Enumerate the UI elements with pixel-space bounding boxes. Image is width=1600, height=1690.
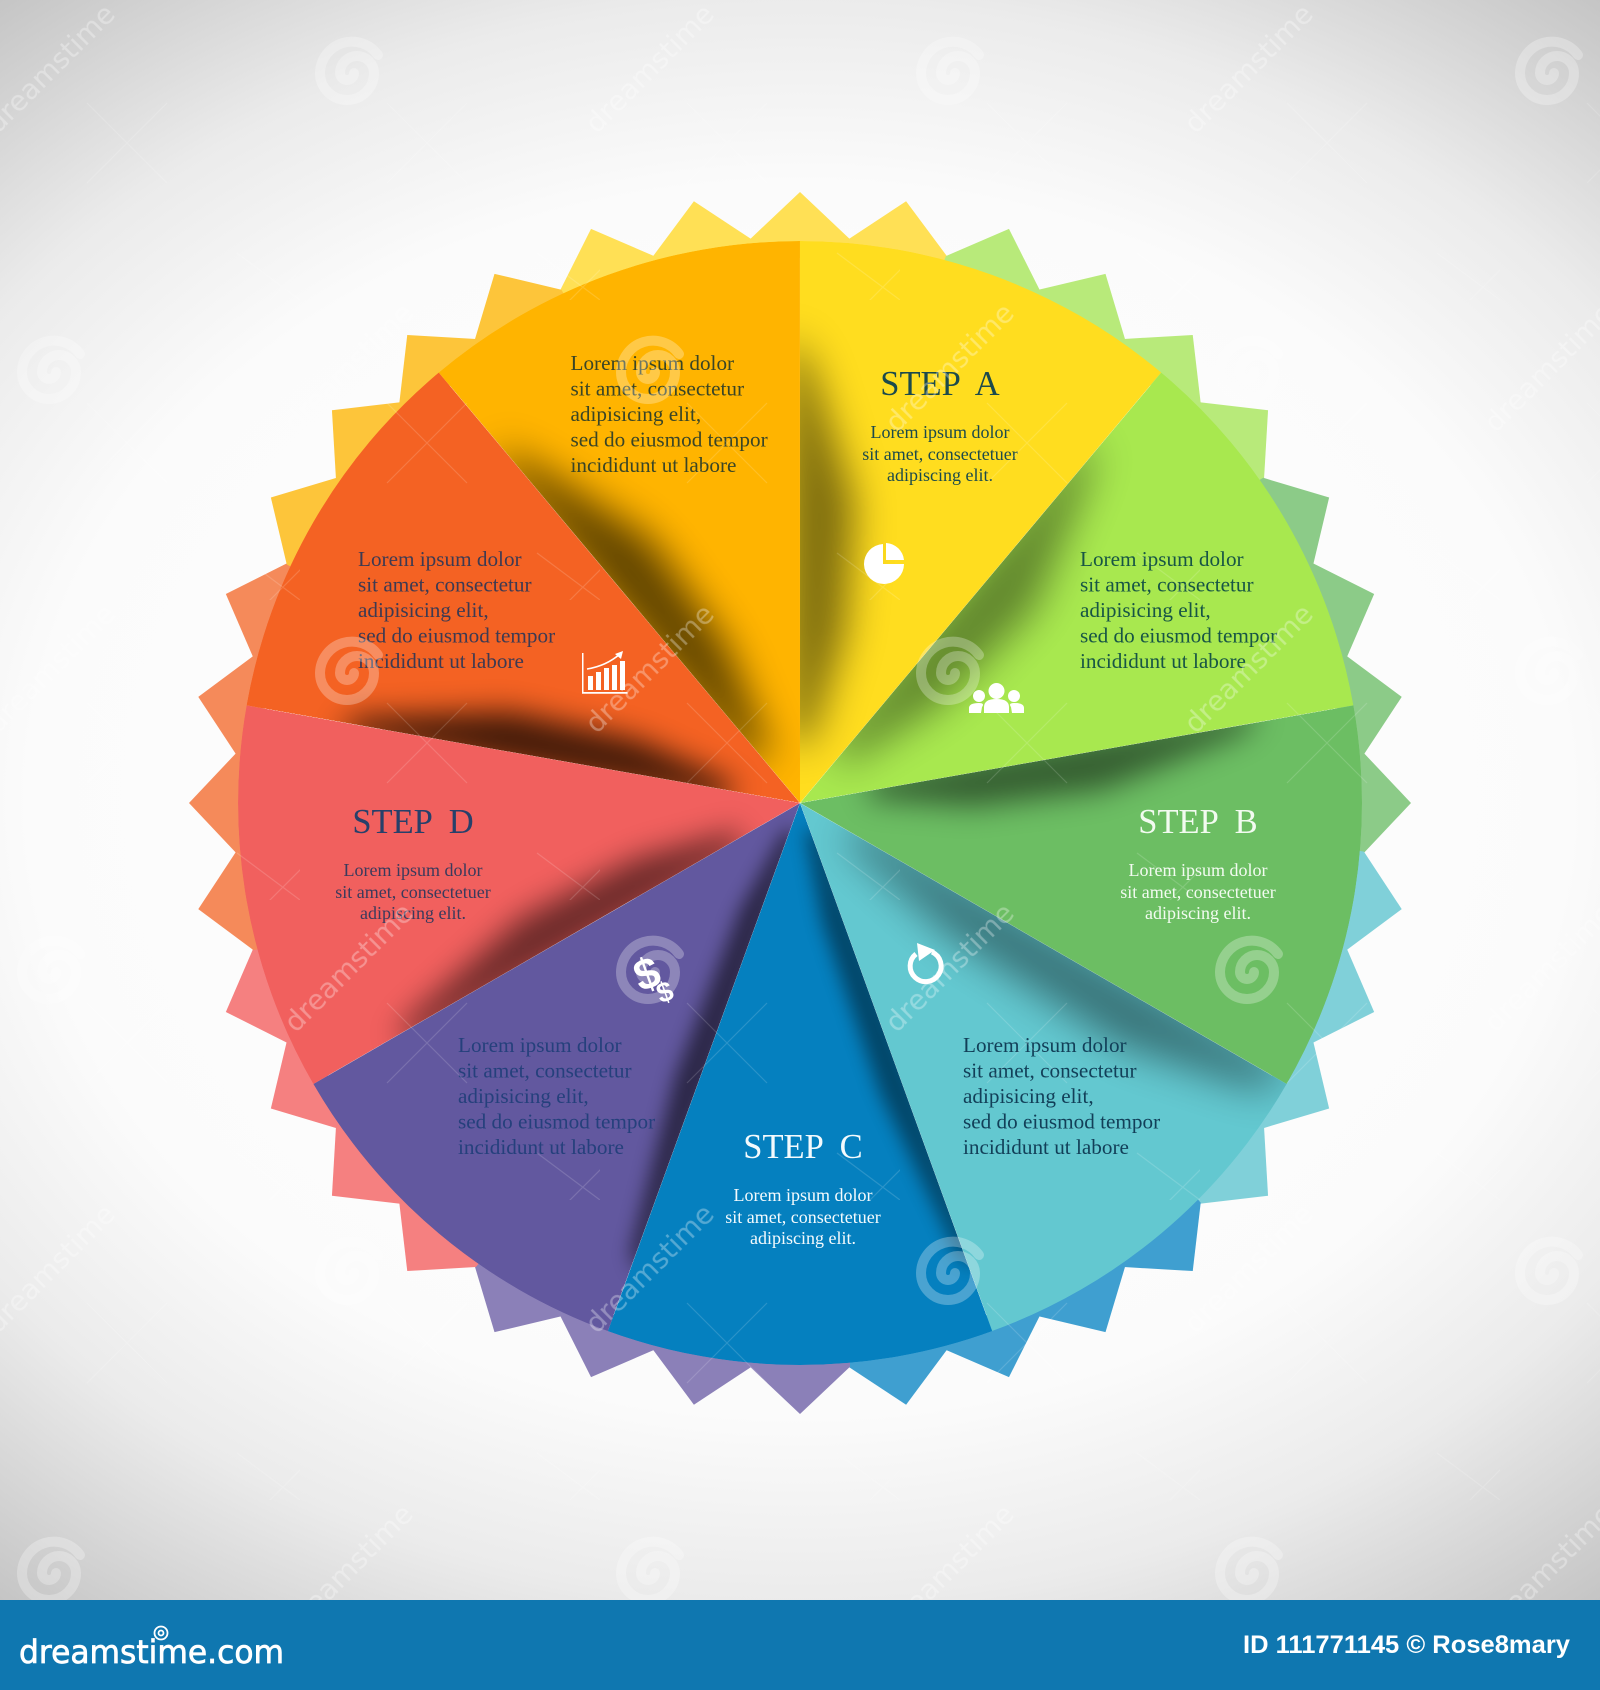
text: teal sector: sed do eiusmod tempor [963, 1110, 1160, 1134]
spikes: light green [939, 212, 1300, 491]
body: step C: adipiscing elit. [750, 1228, 856, 1248]
text: teal sector: incididunt ut labore [963, 1135, 1129, 1159]
text: orange sector: incididunt ut labore [358, 649, 524, 673]
icon: people [969, 683, 1024, 713]
spikes: salmon [209, 942, 488, 1303]
icon: dollar signs: $ [627, 947, 667, 1002]
body: step D [335, 860, 491, 923]
watermark wordmarks: dreamstime [1177, 0, 1319, 139]
body: step A: adipiscing elit. [887, 465, 993, 485]
text: orange sector: sed do eiusmod tempor [358, 624, 555, 648]
spikes: amber [246, 249, 571, 574]
sector: green step B [800, 706, 1362, 1084]
text: teal sector [963, 1033, 1160, 1159]
body: step D: adipiscing elit. [360, 903, 466, 923]
text: teal sector: sit amet, consectetur [963, 1058, 1137, 1082]
text: amber sector: incididunt ut labore [570, 453, 736, 477]
wheel diagram [189, 192, 1411, 1414]
watermark wordmarks: dreamstime [578, 597, 720, 739]
footer bar [0, 1600, 1600, 1690]
watermark wordmarks: dreamstime [878, 1497, 1020, 1639]
spikes: teal [1185, 848, 1410, 1234]
spikes: green [1247, 454, 1411, 853]
text: lime sector: Lorem ipsum dolor [1080, 547, 1244, 571]
body: step A: sit amet, consectetuer [862, 444, 1018, 464]
text: orange sector [358, 547, 555, 673]
text: amber sector: adipisicing elit, [570, 402, 701, 426]
heading: step A: STEP A [880, 365, 1000, 403]
body: step A [862, 422, 1018, 485]
heading: step C: STEP C [743, 1128, 863, 1166]
text: orange sector: Lorem ipsum dolor [358, 547, 522, 571]
body: step B: adipiscing elit. [1145, 903, 1251, 923]
icon: dollar signs: $ [652, 975, 678, 1009]
body: step B: sit amet, consectetuer [1120, 882, 1276, 902]
footer credit: ID 111771145 © Rose8mary [1243, 1631, 1570, 1659]
text: step A [862, 365, 1018, 485]
text: lime sector [1080, 547, 1277, 673]
text: lime sector: sit amet, consectetur [1080, 572, 1254, 596]
body: step D: sit amet, consectetuer [335, 882, 491, 902]
watermark wordmarks: dreamstime [878, 896, 1020, 1038]
text: teal sector: adipisicing elit, [963, 1084, 1094, 1108]
text: purple sector: Lorem ipsum dolor [458, 1033, 622, 1057]
text: teal sector: Lorem ipsum dolor [963, 1033, 1127, 1057]
body: step C: sit amet, consectetuer [725, 1207, 881, 1227]
text: purple sector: sed do eiusmod tempor [458, 1110, 655, 1134]
body: step A: Lorem ipsum dolor [871, 422, 1009, 442]
body: step C [725, 1185, 881, 1248]
body: step B [1120, 860, 1276, 923]
text: amber sector: sit amet, consectetur [570, 376, 744, 400]
sector: orange [246, 372, 800, 803]
icon: bar chart [582, 651, 628, 694]
text: amber sector: Lorem ipsum dolor [570, 351, 734, 375]
footer logo: spiral mark [154, 1626, 168, 1640]
text: orange sector: adipisicing elit, [358, 598, 489, 622]
heading: step B: STEP B [1138, 803, 1258, 841]
watermark wordmarks: dreamstime [878, 296, 1020, 438]
footer logo text: dreamstime.com [19, 1633, 284, 1671]
text: amber sector: sed do eiusmod tempor [570, 428, 768, 452]
text: purple sector: sit amet, consectetur [458, 1058, 632, 1082]
watermark wordmarks: dreamstime [1177, 1197, 1319, 1339]
text: step D [335, 803, 491, 923]
sector: blue step C [608, 804, 992, 1365]
spikes: orange [189, 547, 305, 958]
spikes: purple [451, 1250, 850, 1414]
heading: step D: STEP D [352, 803, 474, 841]
sector: red step D [238, 706, 800, 1084]
sector: purple [314, 803, 800, 1331]
icon: pie chart [864, 543, 904, 584]
body: step B: Lorem ipsum dolor [1129, 860, 1267, 880]
watermark wordmarks: dreamstime [1177, 597, 1319, 739]
watermark wordmarks: dreamstime [277, 1497, 419, 1639]
watermark wordmarks: dreamstime [578, 1197, 720, 1339]
watermark wordmarks: dreamstime [277, 296, 419, 438]
text: lime sector: sed do eiusmod tempor [1080, 624, 1277, 648]
watermark wordmarks: dreamstime [578, 0, 720, 139]
watermark wordmarks: dreamstime [277, 896, 419, 1038]
body: step D: Lorem ipsum dolor [344, 860, 482, 880]
sector: teal [800, 803, 1286, 1331]
text: purple sector: incididunt ut labore [458, 1135, 624, 1159]
text: lime sector: adipisicing elit, [1080, 598, 1211, 622]
spikes: blue [845, 1188, 1231, 1413]
text: step C [725, 1128, 881, 1248]
spikes: yellow [544, 192, 955, 308]
text: purple sector: adipisicing elit, [458, 1084, 589, 1108]
body: step C: Lorem ipsum dolor [734, 1185, 872, 1205]
text: lime sector: incididunt ut labore [1080, 649, 1246, 673]
sector: amber [439, 241, 800, 803]
icon: refresh arrow [910, 943, 941, 982]
text: purple sector [458, 1033, 655, 1159]
sector: lime [800, 372, 1354, 803]
spikes ring [189, 192, 1411, 1414]
text: orange sector: sit amet, consectetur [358, 572, 532, 596]
icon: dollar signs [627, 947, 678, 1009]
text: amber sector [570, 351, 768, 477]
text: step B [1120, 803, 1276, 923]
sector: yellow step A [786, 241, 1161, 803]
